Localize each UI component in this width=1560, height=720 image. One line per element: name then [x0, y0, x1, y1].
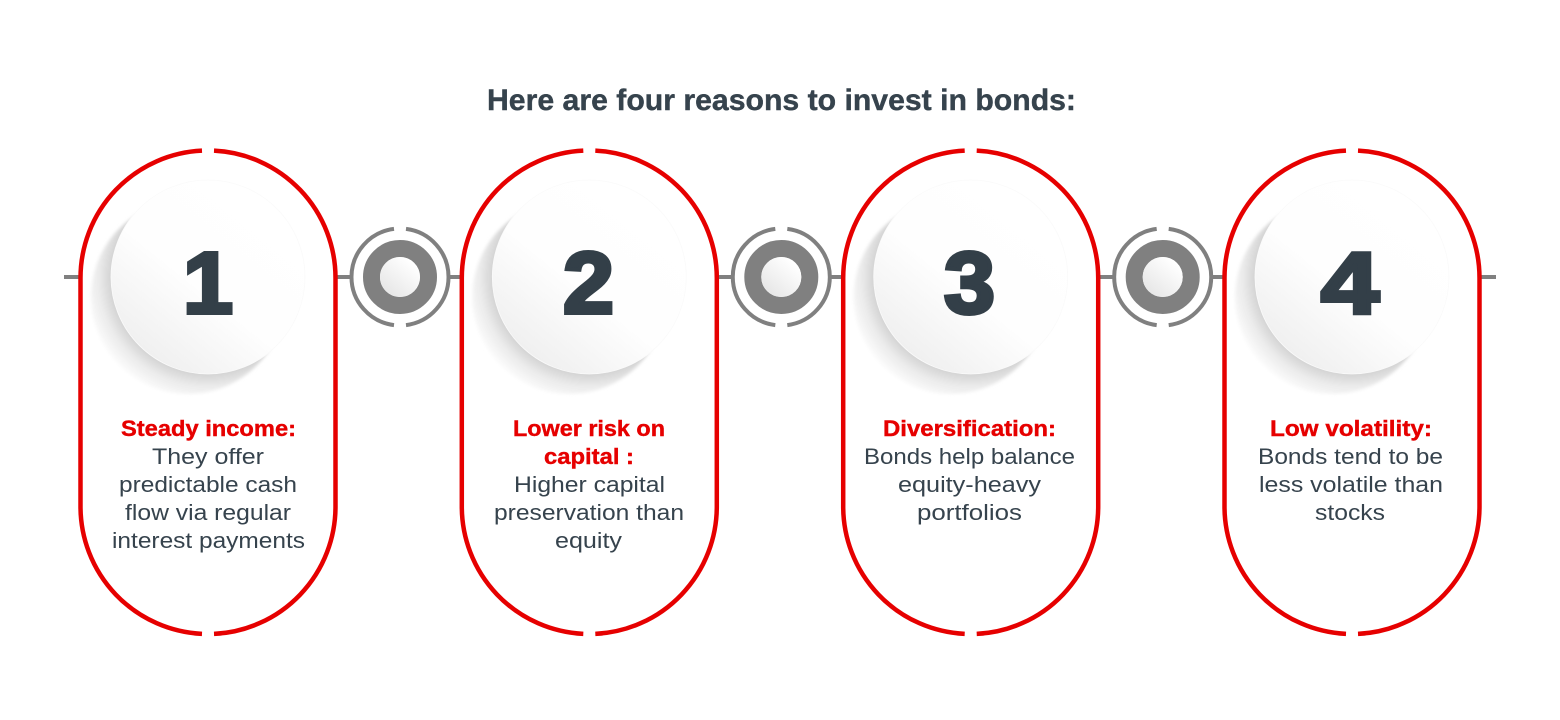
- pill outline 3: [843, 151, 1098, 634]
- text: diversification: Diversification:: [883, 416, 1056, 441]
- connector ring 1: [351, 229, 449, 325]
- text: lower risk on capital: equity: [555, 528, 622, 553]
- text: diversification: Bonds help balance: [864, 444, 1075, 469]
- text: diversification: [864, 416, 1075, 525]
- text: lower risk on capital: [494, 416, 684, 553]
- panel: diversification: [843, 151, 1098, 634]
- pill outline 2: [462, 151, 717, 634]
- text: steady income: flow via regular: [125, 500, 291, 525]
- text: low volatility: [1258, 416, 1443, 525]
- text: low volatility: Low volatility:: [1270, 416, 1432, 441]
- text: steady income: Steady income:: [121, 416, 296, 441]
- text: diversification: equity-heavy: [898, 472, 1041, 497]
- text: lower risk on capital: Higher capital: [514, 472, 665, 497]
- text: lower risk on capital: Lower risk on: [513, 416, 665, 441]
- panel: low volatility: [1224, 151, 1480, 634]
- text: lower risk on capital: preservation than: [494, 500, 684, 525]
- text: steady income: [112, 416, 305, 553]
- text: steady income: predictable cash: [119, 472, 297, 497]
- connector ring 3: [1114, 229, 1211, 325]
- text: low volatility: less volatile than: [1259, 472, 1443, 497]
- number 3: 3: [944, 235, 995, 332]
- panel: steady income: [80, 151, 336, 634]
- text: steady income: interest payments: [112, 528, 305, 553]
- text: diversification: portfolios: [917, 500, 1022, 525]
- number sphere 2: [472, 180, 686, 394]
- connecting line segments: [64, 275, 1496, 279]
- text: lower risk on capital: capital :: [544, 444, 634, 469]
- text: steady income: They offer: [152, 444, 264, 469]
- number sphere 1: [91, 180, 305, 394]
- number 2: 2: [563, 235, 614, 332]
- number 1: 1: [183, 235, 233, 332]
- panel: lower risk on capital: [462, 151, 717, 634]
- title: Here are four reasons to invest in bonds:: [487, 84, 1076, 117]
- pill outline 4: [1224, 151, 1480, 634]
- number sphere 3: [854, 180, 1068, 394]
- text: low volatility: stocks: [1315, 500, 1385, 525]
- pill outline 1: [80, 151, 336, 634]
- number 4: 4: [1321, 235, 1379, 332]
- number sphere 4: [1235, 180, 1449, 394]
- connector ring 2: [733, 229, 830, 325]
- text: low volatility: Bonds tend to be: [1258, 444, 1443, 469]
